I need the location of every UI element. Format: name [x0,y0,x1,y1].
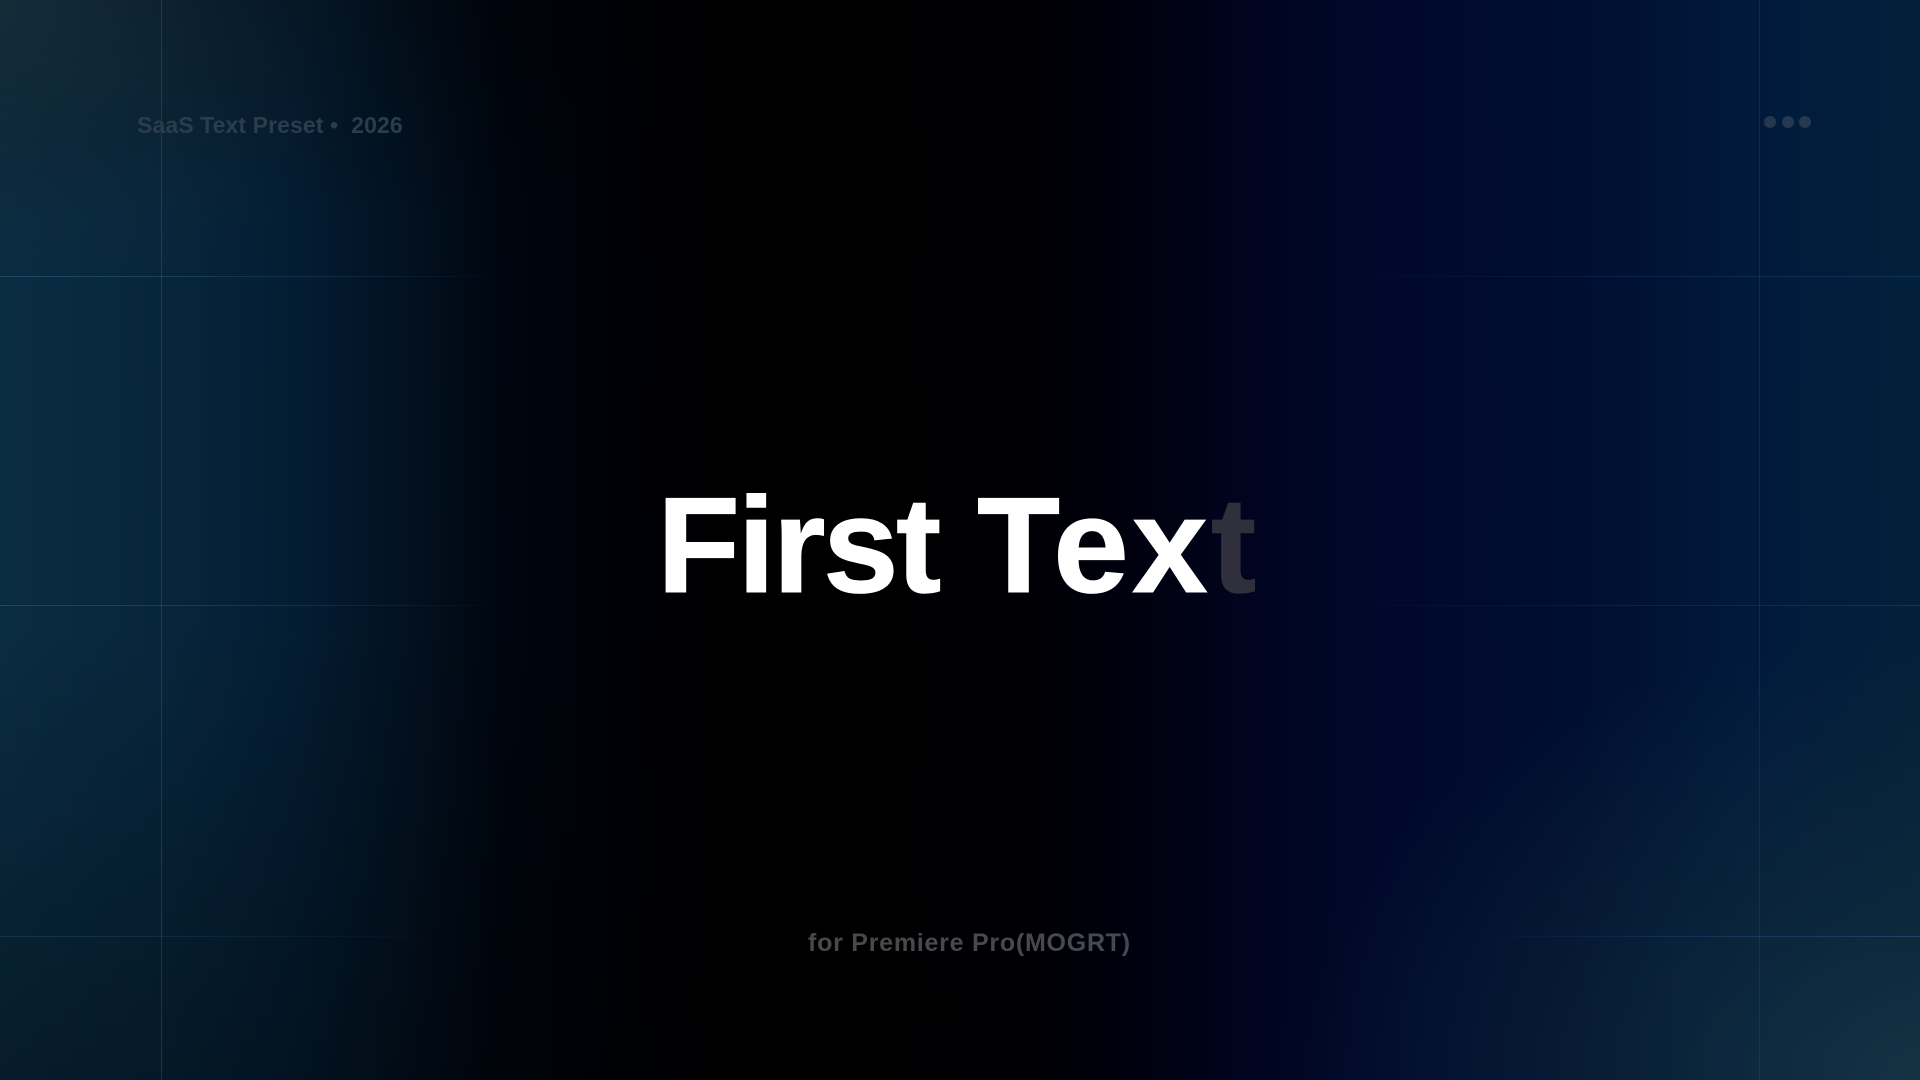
title [657,469,1259,621]
header label: SaaS Text Preset • 2026 [137,112,403,138]
subtitle: for Premiere Pro(MOGRT) [808,929,1131,957]
title: Text [977,469,1259,621]
icon: three dots menu [1764,116,1811,128]
title: First [657,469,939,621]
